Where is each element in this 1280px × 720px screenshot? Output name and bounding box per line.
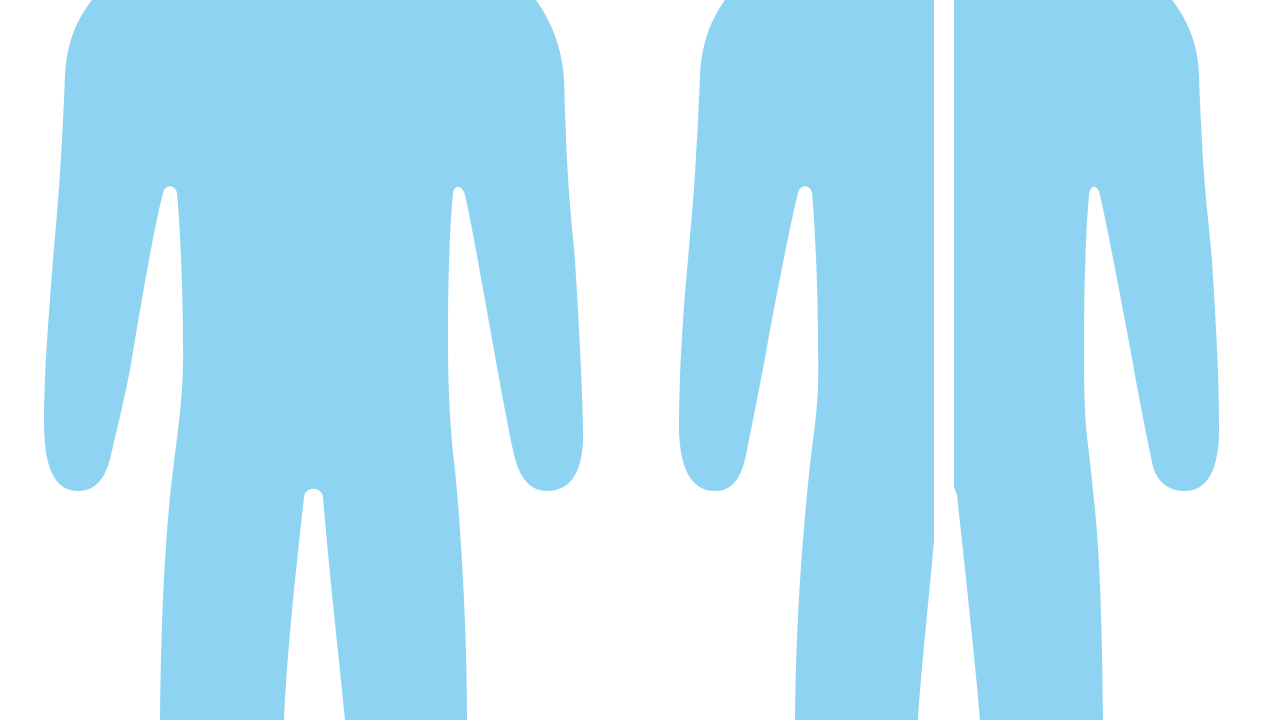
- figure: whole body silhouette: [44, 0, 583, 720]
- figure: left half of split silhouette: [679, 0, 934, 720]
- figure: right half of split silhouette: [954, 0, 1219, 720]
